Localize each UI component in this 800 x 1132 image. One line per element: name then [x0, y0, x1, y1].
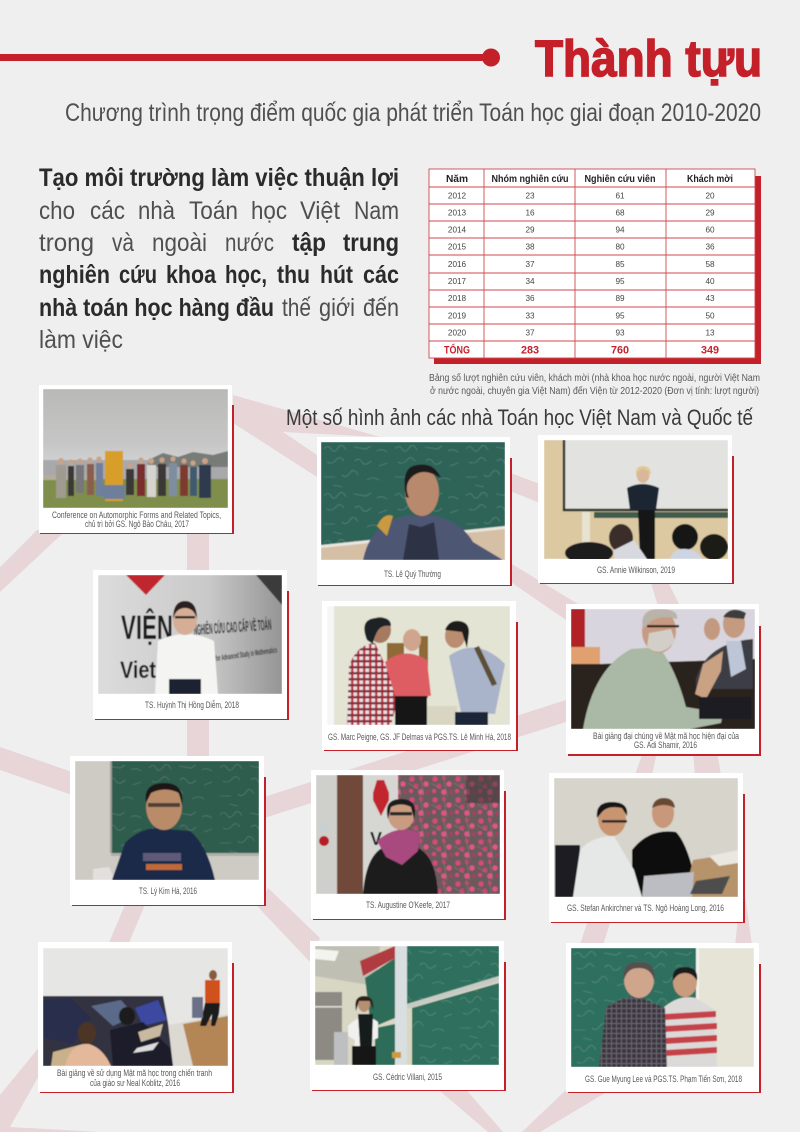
photo: man at blackboard — [321, 442, 505, 560]
photo card: Augustine O'Keefe — [311, 770, 506, 920]
table rows: 2019 — [448, 312, 467, 320]
table header: Năm — [446, 174, 468, 185]
table rows: 40 — [705, 277, 715, 286]
table totals: 283 — [521, 344, 539, 356]
photo card: Huynh Thi Hong Diem — [93, 570, 289, 720]
caption: TS. Lý Kim Hà, 2016 — [139, 886, 197, 896]
caption: GS. Cédric Villani, 2015 — [373, 1072, 442, 1082]
photo: woman at the institute sign: VIỆN — [121, 609, 173, 647]
table rows: 2020 — [448, 328, 467, 338]
table rows: 93 — [615, 328, 625, 338]
table rows: 2013 — [448, 208, 467, 218]
caption — [593, 731, 740, 750]
table rows: 95 — [615, 312, 625, 320]
photo card: Cedric Villani — [310, 941, 506, 1091]
caption — [57, 1068, 212, 1088]
photo: lecture with Adi Shamir — [571, 609, 755, 729]
table header: Khách mời — [687, 174, 733, 185]
table rows: 2015 — [448, 242, 467, 252]
photo: woman by pink flowers: V — [370, 829, 382, 849]
table rows: 68 — [615, 208, 625, 218]
caption: TS. Lê Quý Thường — [384, 569, 441, 579]
intro paragraph: đến — [363, 294, 399, 322]
table rows: 60 — [705, 226, 715, 234]
table rows: 13 — [705, 328, 715, 338]
intro paragraph: nhà — [138, 197, 175, 225]
table rows: 36 — [705, 242, 715, 252]
intro paragraph: giới — [319, 294, 355, 322]
table rows: 89 — [615, 294, 625, 303]
table rows: 37 — [525, 260, 535, 269]
intro paragraph: nghiên — [39, 261, 110, 289]
caption: GS. Marc Peigne, GS. JF Delmas và PGS.TS. Lê Minh Hà, 2018 — [328, 732, 511, 742]
table rows: 50 — [705, 312, 715, 320]
table rows: 29 — [705, 208, 715, 218]
table header: Nhóm nghiên cứu — [492, 174, 568, 185]
photo card: Stefan Ankirchner and Ngo Hoang Long — [549, 773, 745, 923]
intro paragraph: học — [251, 197, 287, 225]
photo: group at Ha Long — [43, 389, 228, 508]
table rows: 2016 — [448, 260, 467, 269]
photo: woman at the institute sign: Viet — [120, 657, 156, 684]
caption: TS. Augustine O'Keefe, 2017 — [366, 900, 450, 910]
intro paragraph: cho — [39, 197, 75, 225]
photo card: Annie Wilkinson — [538, 435, 734, 584]
table rows: 38 — [525, 242, 535, 252]
table totals: TỔNG — [444, 344, 470, 356]
intro paragraph: thu — [277, 261, 310, 289]
photo: woman by pink flowers — [316, 775, 500, 894]
photo: two men by blackboard — [571, 948, 754, 1067]
photo card: Neal Koblitz lecture — [38, 942, 234, 1093]
intro paragraph: tập — [292, 229, 326, 257]
intro paragraph: Việt — [300, 197, 340, 225]
photo card: Ly Kim Ha — [70, 756, 266, 906]
table rows: 61 — [615, 192, 625, 200]
caption: Conference on Automorphic Forms and Related Topics, — [52, 510, 221, 520]
header line with end dot — [0, 48, 500, 66]
intro paragraph: học, — [225, 261, 267, 289]
photo card: Gue Myung Lee and Pham Tien Son — [566, 943, 761, 1093]
table rows: 16 — [525, 208, 535, 218]
caption: Bài giảng đại chúng về Mật mã học hiện đại của — [593, 731, 740, 741]
caption — [52, 510, 221, 529]
photo: woman at the institute sign — [98, 575, 282, 694]
table header: Nghiên cứu viên — [584, 174, 656, 185]
photo: two men with laptops — [554, 778, 738, 897]
photo card: conference — [39, 385, 234, 534]
intro paragraph: ngoài — [152, 229, 207, 257]
photo card: Le Quy Thuong — [317, 437, 512, 586]
caption: GS. Adi Shamir, 2016 — [634, 740, 697, 750]
photo card: Adi Shamir — [566, 604, 761, 756]
table rows: 2018 — [448, 294, 467, 303]
intro paragraph: nhà toán học hàng đầu — [39, 294, 274, 322]
table totals: 760 — [611, 344, 629, 356]
photo: lecturer in front of screen — [544, 440, 728, 559]
table caption — [429, 372, 760, 397]
intro paragraph: trong — [39, 229, 94, 257]
table rows: 29 — [525, 226, 535, 234]
intro paragraph: trung — [343, 229, 399, 257]
table totals — [444, 344, 719, 356]
table rows: 34 — [525, 277, 535, 286]
photo: man at blackboard — [75, 761, 259, 880]
photo card: Peigne, Delmas, Le Minh Ha — [322, 601, 518, 751]
table rows: 2012 — [448, 192, 467, 200]
caption: GS. Stefan Ankirchner và TS. Ngô Hoàng Long, 2016 — [567, 903, 724, 913]
intro paragraph: các — [363, 261, 399, 289]
table rows: 37 — [525, 328, 535, 338]
intro paragraph: cứu — [119, 261, 157, 289]
table rows: 80 — [615, 242, 625, 252]
intro paragraph: các — [90, 197, 125, 225]
table caption: Bảng số lượt nghiên cứu viên, khách mời (nhà khoa học nước ngoài, người Việt Nam — [429, 372, 760, 384]
photo: classroom with audience — [43, 948, 228, 1066]
table rows: 58 — [705, 260, 715, 269]
intro paragraph: Tạo môi trường làm việc thuận lợi — [39, 164, 399, 192]
intro paragraph: nước — [225, 229, 274, 257]
table rows: 23 — [525, 192, 535, 200]
table rows: 33 — [525, 312, 535, 320]
intro paragraph: và — [112, 229, 134, 257]
caption: chủ trì bởi GS. Ngô Bảo Châu, 2017 — [85, 519, 189, 529]
intro paragraph: thế — [282, 294, 311, 322]
intro paragraph: Toán — [189, 197, 238, 225]
intro paragraph: Nam — [354, 197, 399, 225]
table rows: 85 — [615, 260, 625, 269]
table totals: 349 — [701, 344, 719, 356]
data table — [429, 169, 761, 364]
table rows: 20 — [705, 192, 715, 200]
table rows — [448, 192, 715, 338]
caption: TS. Huỳnh Thị Hồng Diễm, 2018 — [145, 700, 239, 710]
intro paragraph — [39, 164, 399, 354]
caption: của giáo sư Neal Koblitz, 2016 — [90, 1078, 180, 1088]
table rows: 95 — [615, 277, 625, 286]
table caption: ở nước ngoài, chuyên gia Việt Nam) đến Viện từ 2012-2020 (Đơn vị tính: lượt người) — [430, 385, 759, 397]
intro paragraph: hút — [320, 261, 354, 289]
background network of pale red lines — [0, 395, 752, 1132]
title: Thành tựu — [535, 30, 762, 87]
table header — [446, 174, 733, 185]
table rows: 2017 — [448, 277, 467, 286]
caption: Bài giảng về sử dụng Mật mã học trong chiến tranh — [57, 1068, 212, 1078]
caption: GS. Annie Wilkinson, 2019 — [597, 565, 675, 575]
photo: lecturer by green boards — [315, 946, 499, 1065]
table rows: 2014 — [448, 226, 467, 234]
intro paragraph: làm việc — [39, 326, 123, 354]
intro paragraph: khoa — [166, 261, 217, 289]
photo: three men in corridor — [328, 606, 510, 725]
table rows: 43 — [705, 294, 715, 303]
table rows: 36 — [525, 294, 535, 303]
table rows: 94 — [615, 226, 625, 234]
